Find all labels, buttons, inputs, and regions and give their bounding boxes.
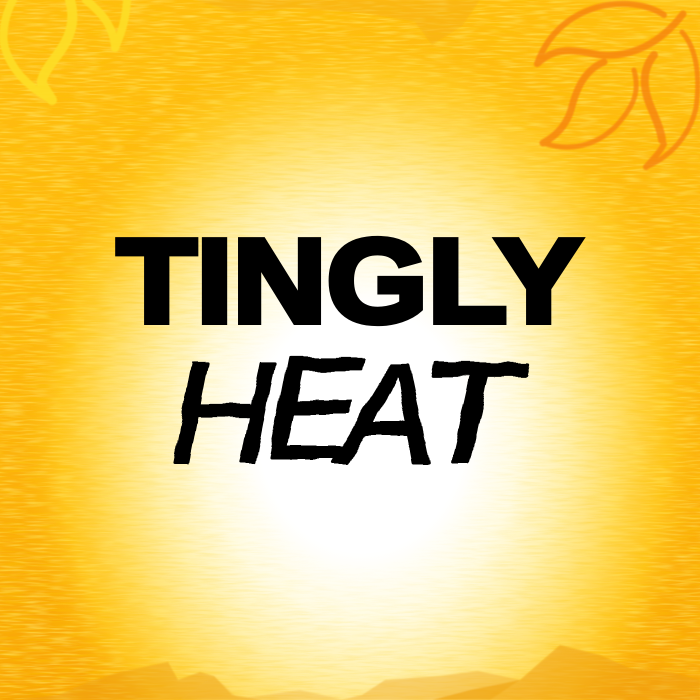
subtitle: HEAT: H [170, 332, 275, 493]
torn paper strip: top edge [195, 0, 700, 45]
mountains: torn paper strip at the bottom [0, 645, 700, 700]
subtitle: HEAT: T [418, 333, 529, 494]
subtitle: HEAT: A [332, 333, 436, 494]
icon: yellow leaves, top left [4, 0, 127, 100]
subtitle: HEAT: E [266, 328, 364, 489]
icon: orange leaves, top right [537, 4, 698, 167]
title: TINGLY: TINGLY [117, 215, 582, 348]
subtitle: HEAT [170, 328, 529, 494]
